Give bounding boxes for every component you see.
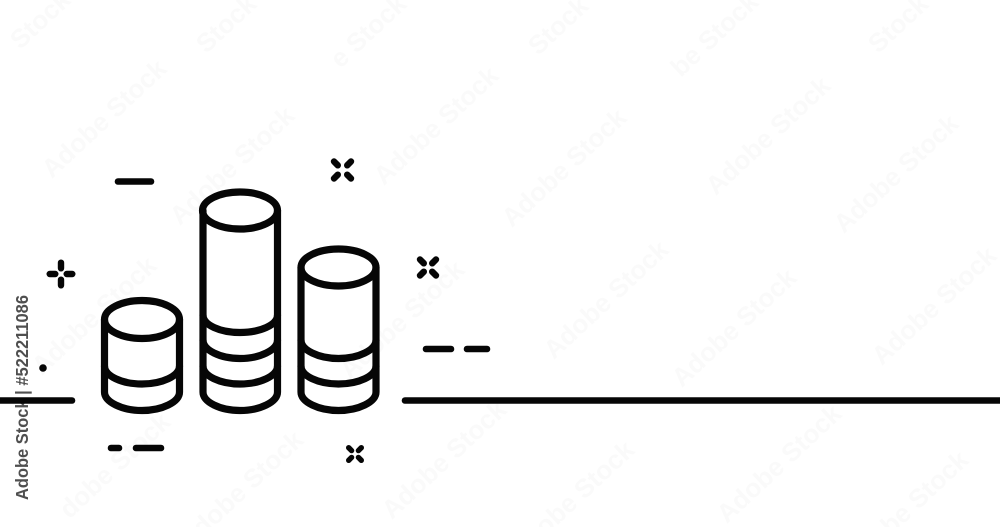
watermark pattern: Adobe Stock bbox=[368, 60, 505, 191]
watermark pattern: Adobe Stock bbox=[700, 70, 837, 201]
icon: medium coin stack bbox=[301, 249, 376, 410]
watermark pattern: dobe Stock bbox=[53, 406, 176, 524]
stock id label: Adobe Stock | #522211086 bbox=[12, 295, 32, 500]
dot bbox=[39, 364, 47, 372]
ground line left bbox=[0, 397, 72, 404]
watermark pattern: Adobe Stock bbox=[666, 262, 803, 393]
sparkle: plus left bbox=[50, 263, 72, 285]
watermark pattern: Adobe Stock bbox=[334, 254, 471, 385]
watermark pattern: Adobe Stock bbox=[866, 240, 1000, 371]
watermark pattern: Adobe Stock bbox=[26, 250, 163, 381]
ground line right bbox=[405, 397, 1000, 404]
dash top left bbox=[118, 178, 151, 185]
watermark pattern: Adobe Stock bbox=[496, 102, 633, 233]
sparkle: cross bottom bbox=[349, 448, 361, 460]
dashes right bbox=[426, 346, 487, 352]
watermark pattern: Adobe Stock bbox=[164, 100, 301, 231]
watermark pattern: Adobe Stock bbox=[538, 234, 675, 365]
watermark pattern: Adobe Stock bbox=[376, 394, 513, 525]
icon: tall coin stack bbox=[202, 192, 278, 410]
sparkle: cross top bbox=[334, 162, 351, 178]
sparkle: cross right bbox=[420, 260, 436, 276]
watermark pattern: Adobe Stock bbox=[828, 108, 965, 239]
dashes bottom left bbox=[111, 445, 161, 451]
icon: small coin stack bbox=[104, 300, 180, 410]
watermark pattern: Adobe Stock bbox=[36, 53, 173, 184]
watermark pattern: Adobe Stock bbox=[711, 398, 848, 527]
